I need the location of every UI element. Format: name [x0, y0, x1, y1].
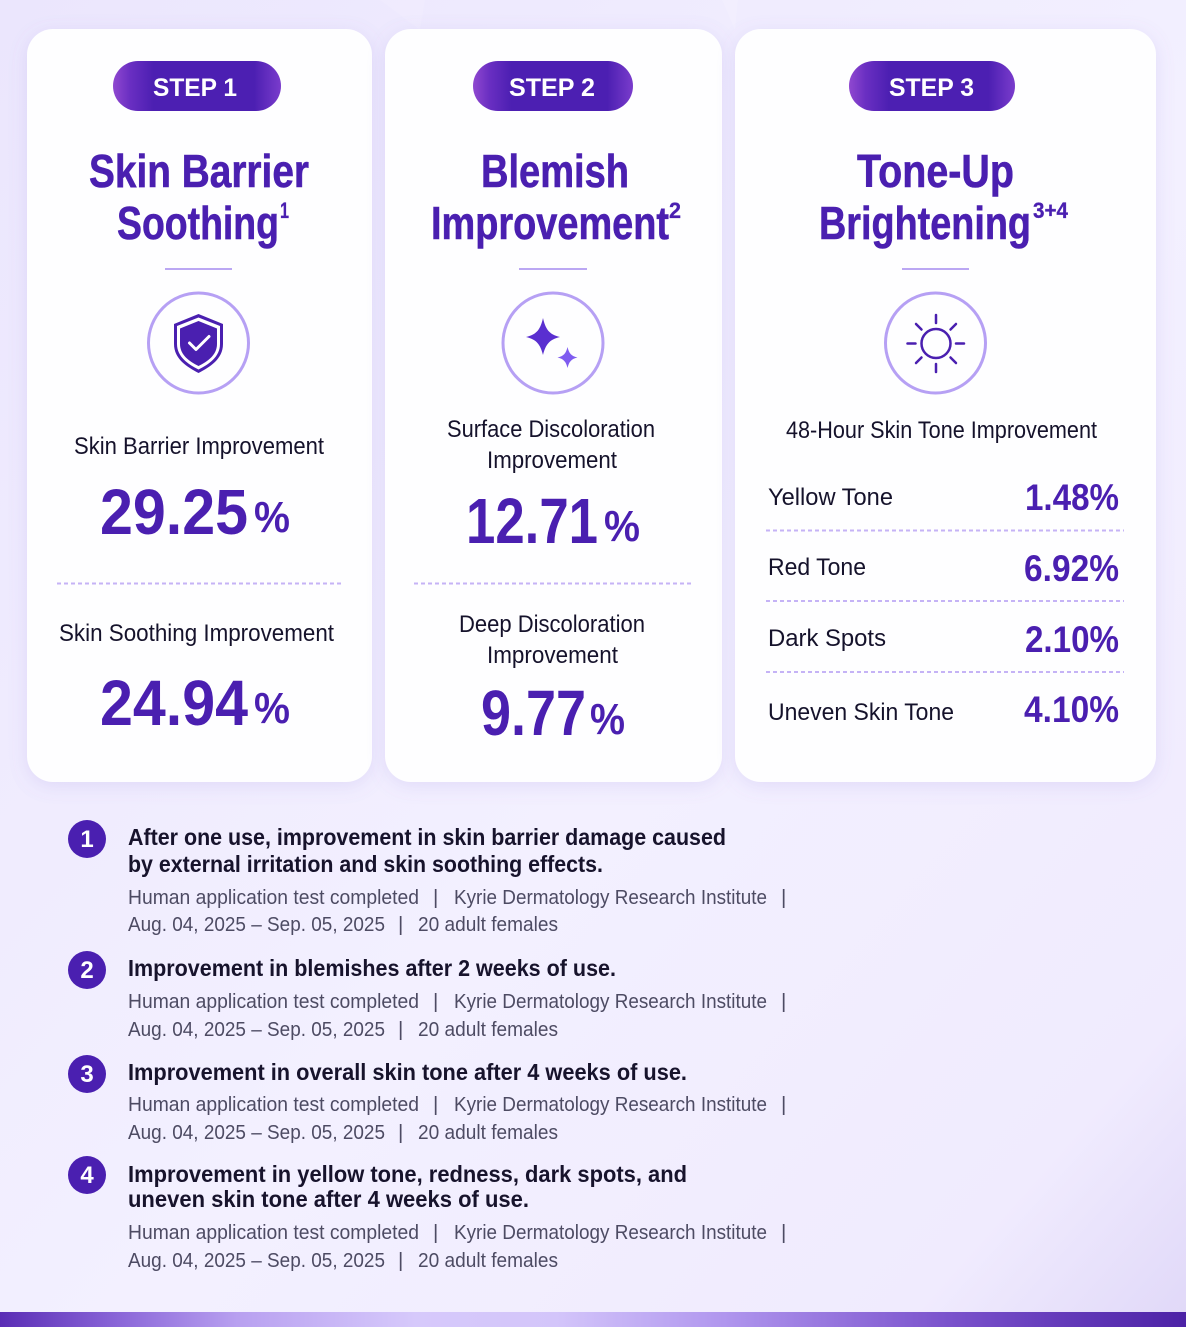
metric: skin barrier improvement: [74, 433, 324, 548]
footnote 3: Aug. 04, 2025 – Sep. 05, 2025: [128, 1121, 385, 1144]
panel: step 1: [27, 29, 372, 782]
metric: deep discoloration improvement: [459, 611, 645, 749]
footnote 4: 20 adult females: [418, 1249, 558, 1272]
footnote 3: Kyrie Dermatology Research Institute: [454, 1093, 767, 1116]
metric: deep discoloration improvement: Deep Discoloration: [459, 611, 645, 638]
footnote 1: Human application test completed: [128, 886, 419, 909]
footnote 2: Improvement in blemishes after 2 weeks of use.: [128, 955, 616, 981]
footnote 4: 4: [80, 1162, 94, 1189]
footnote 3: 3: [80, 1061, 94, 1088]
heading: tone-up brightening: Tone-Up: [857, 145, 1014, 197]
footnote 1: Aug. 04, 2025 – Sep. 05, 2025: [128, 913, 385, 936]
metric: skin soothing improvement: [59, 620, 334, 739]
heading: blemish improvement: 2: [669, 198, 681, 223]
footnote 1: |: [433, 886, 438, 909]
panel: step 3: [735, 29, 1156, 782]
footnote 1: |: [398, 913, 403, 936]
row: dark spots: 2.10%: [1025, 619, 1119, 660]
row: red tone: [768, 548, 1119, 589]
row: yellow tone: Yellow Tone: [768, 484, 893, 511]
footnote 2: |: [781, 990, 786, 1013]
step 2 badge: STEP 2: [509, 74, 595, 102]
row: dark spots: Dark Spots: [768, 625, 886, 652]
heading: blemish improvement: Improvement: [431, 197, 669, 249]
metric: skin barrier improvement: %: [254, 493, 290, 542]
panel: step 2: [385, 29, 722, 782]
heading: 48-hour skin tone improvement: 48-Hour Skin Tone Improvement: [786, 417, 1097, 444]
footnote 2: [68, 951, 786, 1041]
footnote 2: 2: [80, 957, 94, 984]
metric: deep discoloration improvement: %: [590, 695, 625, 744]
metric: skin barrier improvement: 29.25: [100, 476, 248, 548]
row: yellow tone: 1.48%: [1025, 477, 1119, 518]
footnote 1: [68, 820, 786, 936]
heading: skin barrier soothing: Soothing: [117, 197, 279, 249]
metric: surface discoloration improvement: Improvement: [487, 447, 617, 474]
metric: skin barrier improvement: Skin Barrier Improvement: [74, 433, 324, 460]
step 1 badge: STEP 1: [153, 74, 237, 102]
footnote 3: Human application test completed: [128, 1093, 419, 1116]
heading: tone-up brightening: Brightening: [819, 197, 1031, 249]
icon: sun: [886, 293, 986, 393]
footnote 1: 1: [80, 826, 94, 853]
footnote 2: |: [433, 990, 438, 1013]
footnote 3: Improvement in overall skin tone after 4 weeks of use.: [128, 1059, 687, 1085]
icon: sparkles: [503, 293, 603, 393]
metric: skin soothing improvement: %: [254, 684, 290, 733]
heading: blemish improvement: Blemish: [481, 145, 629, 197]
step 3 badge: [849, 61, 1015, 111]
metric: deep discoloration improvement: Improvement: [487, 642, 618, 669]
metric: surface discoloration improvement: %: [604, 502, 640, 551]
footnote 1: by external irritation and skin soothing effects.: [128, 851, 603, 877]
footnote 4: Kyrie Dermatology Research Institute: [454, 1221, 767, 1244]
metric: surface discoloration improvement: [447, 416, 655, 557]
heading: skin barrier soothing: Skin Barrier: [89, 145, 309, 197]
icon: shield with check: [148, 293, 248, 393]
footnote 4: |: [433, 1221, 438, 1244]
row: dark spots: [768, 619, 1119, 660]
heading: tone-up brightening: 3+4: [1033, 198, 1069, 223]
footnote 4: Human application test completed: [128, 1221, 419, 1244]
footnote 2: Aug. 04, 2025 – Sep. 05, 2025: [128, 1018, 385, 1041]
footnote 3: |: [781, 1093, 786, 1116]
footnote 1: |: [781, 886, 786, 909]
row: yellow tone: [768, 477, 1119, 518]
footnote 3: [68, 1055, 786, 1144]
footnote 2: |: [398, 1018, 403, 1041]
footnote 4: [68, 1156, 786, 1272]
bottom gradient bar: [0, 1312, 1186, 1327]
row: red tone: 6.92%: [1024, 548, 1119, 589]
footnote 1: Kyrie Dermatology Research Institute: [454, 886, 767, 909]
footnote 2: Human application test completed: [128, 990, 419, 1013]
heading: skin barrier soothing: 1: [280, 198, 289, 223]
metric: skin soothing improvement: Skin Soothing Improvement: [59, 620, 334, 647]
row: uneven skin tone: 4.10%: [1024, 689, 1119, 730]
footnote 4: Improvement in yellow tone, redness, dark spots, and: [128, 1161, 687, 1187]
footnote 3: |: [433, 1093, 438, 1116]
footnote 2: Kyrie Dermatology Research Institute: [454, 990, 767, 1013]
heading: tone-up brightening: [819, 145, 1069, 249]
footnote 4: Aug. 04, 2025 – Sep. 05, 2025: [128, 1249, 385, 1272]
heading: skin barrier soothing: [89, 145, 309, 249]
footnote 4: |: [398, 1249, 403, 1272]
step 3 badge: STEP 3: [889, 74, 974, 102]
heading: blemish improvement: [431, 145, 681, 249]
step 2 badge: [473, 61, 633, 111]
metric: deep discoloration improvement: 9.77: [481, 677, 586, 749]
row: red tone: Red Tone: [768, 554, 866, 581]
row: uneven skin tone: [768, 689, 1119, 730]
footnote 3: |: [398, 1121, 403, 1144]
footnote 4: uneven skin tone after 4 weeks of use.: [128, 1186, 529, 1212]
row: uneven skin tone: Uneven Skin Tone: [768, 699, 954, 726]
footnote 1: 20 adult females: [418, 913, 558, 936]
footnote 2: 20 adult females: [418, 1018, 558, 1041]
metric: skin soothing improvement: 24.94: [100, 667, 248, 739]
step 1 badge: [113, 61, 281, 111]
footnote 1: After one use, improvement in skin barrier damage caused: [128, 824, 726, 850]
footnote 4: |: [781, 1221, 786, 1244]
metric: surface discoloration improvement: 12.71: [466, 485, 598, 557]
metric: surface discoloration improvement: Surface Discoloration: [447, 416, 655, 443]
footnote 3: 20 adult females: [418, 1121, 558, 1144]
